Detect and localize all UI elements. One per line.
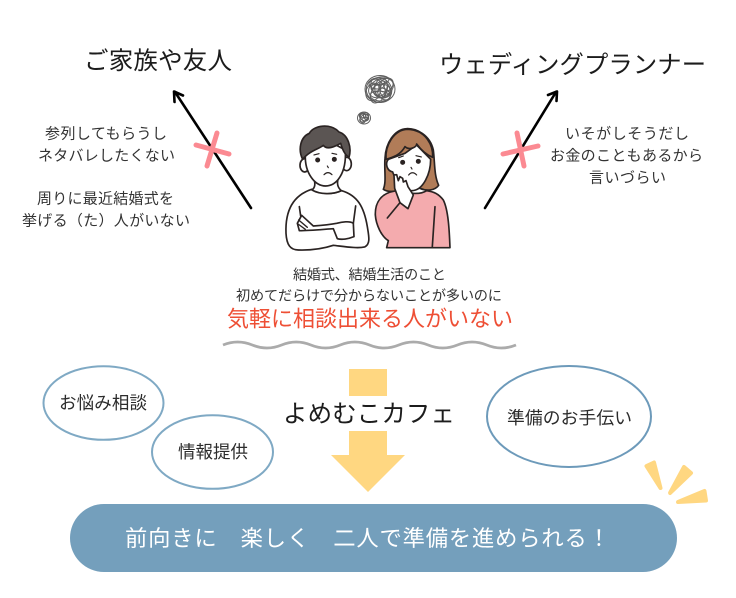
arrow: yellow down arrow bbox=[331, 369, 405, 492]
heading: family and friends: ご家族や友人 bbox=[84, 47, 232, 75]
ellipse: information: 情報提供 bbox=[178, 442, 248, 462]
text block: planner worries: いそがしそうだし bbox=[565, 126, 689, 142]
heading: wedding planner: ウェディングプランナー bbox=[439, 52, 706, 79]
illustration: worried woman bbox=[375, 129, 450, 248]
text block: situation bbox=[236, 268, 502, 304]
icon: cross on left arrow bbox=[196, 133, 229, 166]
illustration: worried man bbox=[286, 126, 369, 250]
icon: worried scribbles bbox=[358, 73, 397, 124]
text block: planner worries: お金のこともあるから bbox=[550, 148, 703, 164]
icon: cross on right arrow bbox=[503, 133, 538, 166]
ellipse: preparation help bbox=[487, 366, 651, 467]
ellipse: counselling: お悩み相談 bbox=[59, 393, 147, 413]
highlighted statement: 気軽に相談出来る人がいない bbox=[227, 306, 513, 332]
banner: conclusion: 前向きに 楽しく 二人で準備を進められる！ bbox=[125, 526, 610, 551]
ellipse: counselling bbox=[44, 366, 164, 440]
text block: family worries: 挙げる（た）人がいない bbox=[22, 212, 190, 230]
icon: yellow sparkle rays bbox=[646, 462, 706, 502]
wavy underline bbox=[223, 342, 516, 348]
text block: situation: 結婚式、結婚生活のこと bbox=[293, 268, 446, 284]
ellipse: information bbox=[152, 415, 273, 489]
text block: situation: 初めてだらけで分からないことが多いのに bbox=[236, 288, 502, 304]
text block: family worries: 参列してもらうし bbox=[45, 126, 167, 142]
text block: planner worries: 言いづらい bbox=[589, 170, 666, 186]
arrow: toward wedding planner bbox=[485, 92, 557, 208]
text block: family worries: 周りに最近結婚式を bbox=[37, 190, 174, 208]
arrow: toward family and friends bbox=[174, 92, 251, 208]
ellipse: preparation help: 準備のお手伝い bbox=[507, 408, 632, 428]
heading: yomemuko cafe: よめむこカフェ bbox=[283, 401, 455, 428]
banner: conclusion bbox=[70, 504, 677, 572]
text block: family worries: ネタバレしたくない bbox=[38, 148, 175, 164]
text block: family worries bbox=[22, 126, 190, 230]
text block: planner worries bbox=[550, 126, 703, 186]
